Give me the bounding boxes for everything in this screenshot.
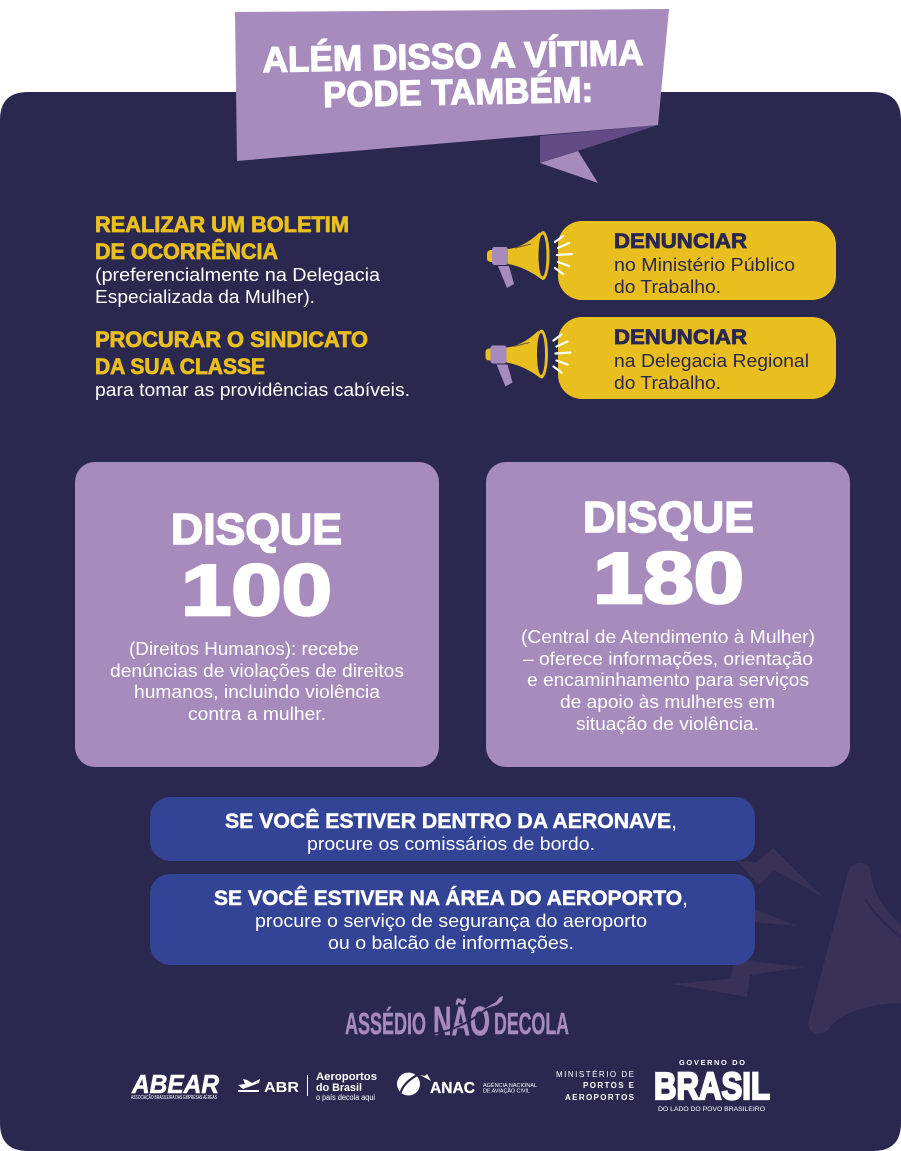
logo: ABEAR: ASSOCIAÇÃO BRASILEIRA DAS EMPRESAS AÉREAS	[131, 1094, 217, 1101]
logo: Governo do Brasil: BRASIL	[654, 1066, 770, 1108]
panel: disque 100: denúncias de violações de direitos	[110, 661, 404, 681]
title: ALÉM DISSO A VÍTIMA	[262, 32, 644, 80]
logo: Assédio Não Decola: DECOLA	[494, 1006, 569, 1041]
logo: Governo do Brasil	[654, 1058, 770, 1113]
callout: denunciar na Delegacia Regional	[558, 317, 836, 399]
text block: boletim de ocorrência: DE OCORRÊNCIA	[95, 239, 278, 264]
logo: ANAC: DE AVIAÇÃO CIVIL	[483, 1088, 530, 1094]
callout: dentro da aeronave	[150, 797, 755, 861]
panel: disque 180: DISQUE	[583, 493, 754, 542]
text block: procurar o sindicato: PROCURAR O SINDICATO	[95, 327, 368, 352]
panel: disque 180: (Central de Atendimento à Mulher)	[521, 627, 815, 647]
logo: Ministério de Portos e Aeroportos: PORTOS E	[583, 1081, 635, 1090]
icon: megaphone 1	[487, 231, 572, 288]
panel: disque 180	[486, 462, 850, 767]
logo: ABR Aeroportos do Brasil	[238, 1071, 377, 1102]
logo: ABR Aeroportos do Brasil: Aeroportos	[316, 1071, 377, 1083]
text block: boletim de ocorrência: Especializada da Mulher).	[95, 287, 315, 307]
banner: title ribbon	[235, 9, 669, 183]
text block: boletim de ocorrência: (preferencialmente na Delegacia	[95, 265, 381, 285]
logo: Ministério de Portos e Aeroportos: MINISTÉRIO DE	[556, 1070, 634, 1079]
panel: disque 100: humanos, incluindo violência	[134, 682, 381, 702]
text block: procurar o sindicato: para tomar as providências cabíveis.	[95, 380, 410, 400]
title	[262, 32, 644, 116]
panel: disque 180: – oferece informações, orientação	[523, 649, 813, 669]
callout: denunciar no Ministério Público: DENUNCIAR	[614, 230, 747, 253]
panel: disque 180: situação de violência.	[576, 714, 759, 734]
callout: denunciar na Delegacia Regional: na Delegacia Regional	[614, 351, 809, 371]
text block: boletim de ocorrência: REALIZAR UM BOLETIM	[95, 212, 349, 237]
panel: disque 100	[75, 462, 439, 767]
banner body	[235, 9, 669, 161]
watermark: ghost megaphone and rays	[672, 848, 901, 1034]
text block: procurar o sindicato: DA SUA CLASSE	[95, 354, 265, 379]
panel: disque 100: 100	[181, 551, 332, 631]
callout: denunciar no Ministério Público	[558, 221, 836, 300]
logo: Assédio Não Decola	[345, 996, 569, 1044]
logo: Ministério de Portos e Aeroportos: AEROPORTOS	[565, 1093, 635, 1102]
callout: denunciar no Ministério Público: do Trabalho.	[614, 277, 721, 297]
callout: denunciar na Delegacia Regional: do Trabalho.	[614, 373, 721, 393]
logo: Assédio Não Decola: ASSÉDIO	[345, 1006, 426, 1041]
logo: ABEAR: ABEAR	[131, 1069, 219, 1099]
logo: ABR Aeroportos do Brasil: do Brasil	[316, 1082, 362, 1094]
text block: boletim de ocorrência	[95, 212, 381, 307]
panel: disque 100: contra a mulher.	[188, 704, 326, 724]
panel: disque 100: (Direitos Humanos): recebe	[129, 639, 359, 659]
logo: Governo do Brasil: DO LADO DO POVO BRASILEIRO	[658, 1106, 765, 1113]
panel: disque 100: DISQUE	[171, 505, 342, 554]
panel: disque 180: e encaminhamento para serviços	[527, 670, 809, 690]
callout: área do aeroporto: procure o serviço de segurança do aeroporto	[255, 911, 647, 931]
panel: disque 180: 180	[593, 539, 744, 619]
callout: dentro da aeronave: procure os comissários de bordo.	[307, 834, 595, 854]
panel: disque 180: de apoio às mulheres em	[560, 692, 775, 712]
text block: procurar o sindicato	[95, 327, 410, 400]
logo: Ministério de Portos e Aeroportos	[556, 1070, 635, 1102]
banner tail	[540, 151, 598, 183]
callout: área do aeroporto	[150, 874, 755, 965]
logo: ANAC: AGÊNCIA NACIONAL	[483, 1081, 537, 1089]
logo: ANAC: ANAC	[430, 1080, 475, 1097]
callout: denunciar no Ministério Público: no Ministério Público	[614, 255, 795, 275]
icon: megaphone 2	[486, 330, 570, 386]
logo: Governo do Brasil: GOVERNO DO	[679, 1058, 745, 1067]
logo: Assédio Não Decola: NÃO	[433, 998, 490, 1044]
logo: ABR Aeroportos do Brasil: o país decola aqui	[316, 1093, 375, 1102]
logo: ABR Aeroportos do Brasil: ABR	[264, 1079, 299, 1096]
callout: denunciar na Delegacia Regional: DENUNCIAR	[614, 326, 747, 349]
logo: ANAC	[397, 1072, 537, 1097]
title: PODE TAMBÉM:	[323, 69, 594, 115]
callout: dentro da aeronave: SE VOCÊ ESTIVER DENTRO DA AERONAVE,	[225, 809, 677, 833]
callout: área do aeroporto: ou o balcão de informações.	[328, 933, 574, 953]
callout: área do aeroporto: SE VOCÊ ESTIVER NA ÁREA DO AEROPORTO,	[214, 886, 688, 910]
banner fold	[540, 125, 658, 163]
